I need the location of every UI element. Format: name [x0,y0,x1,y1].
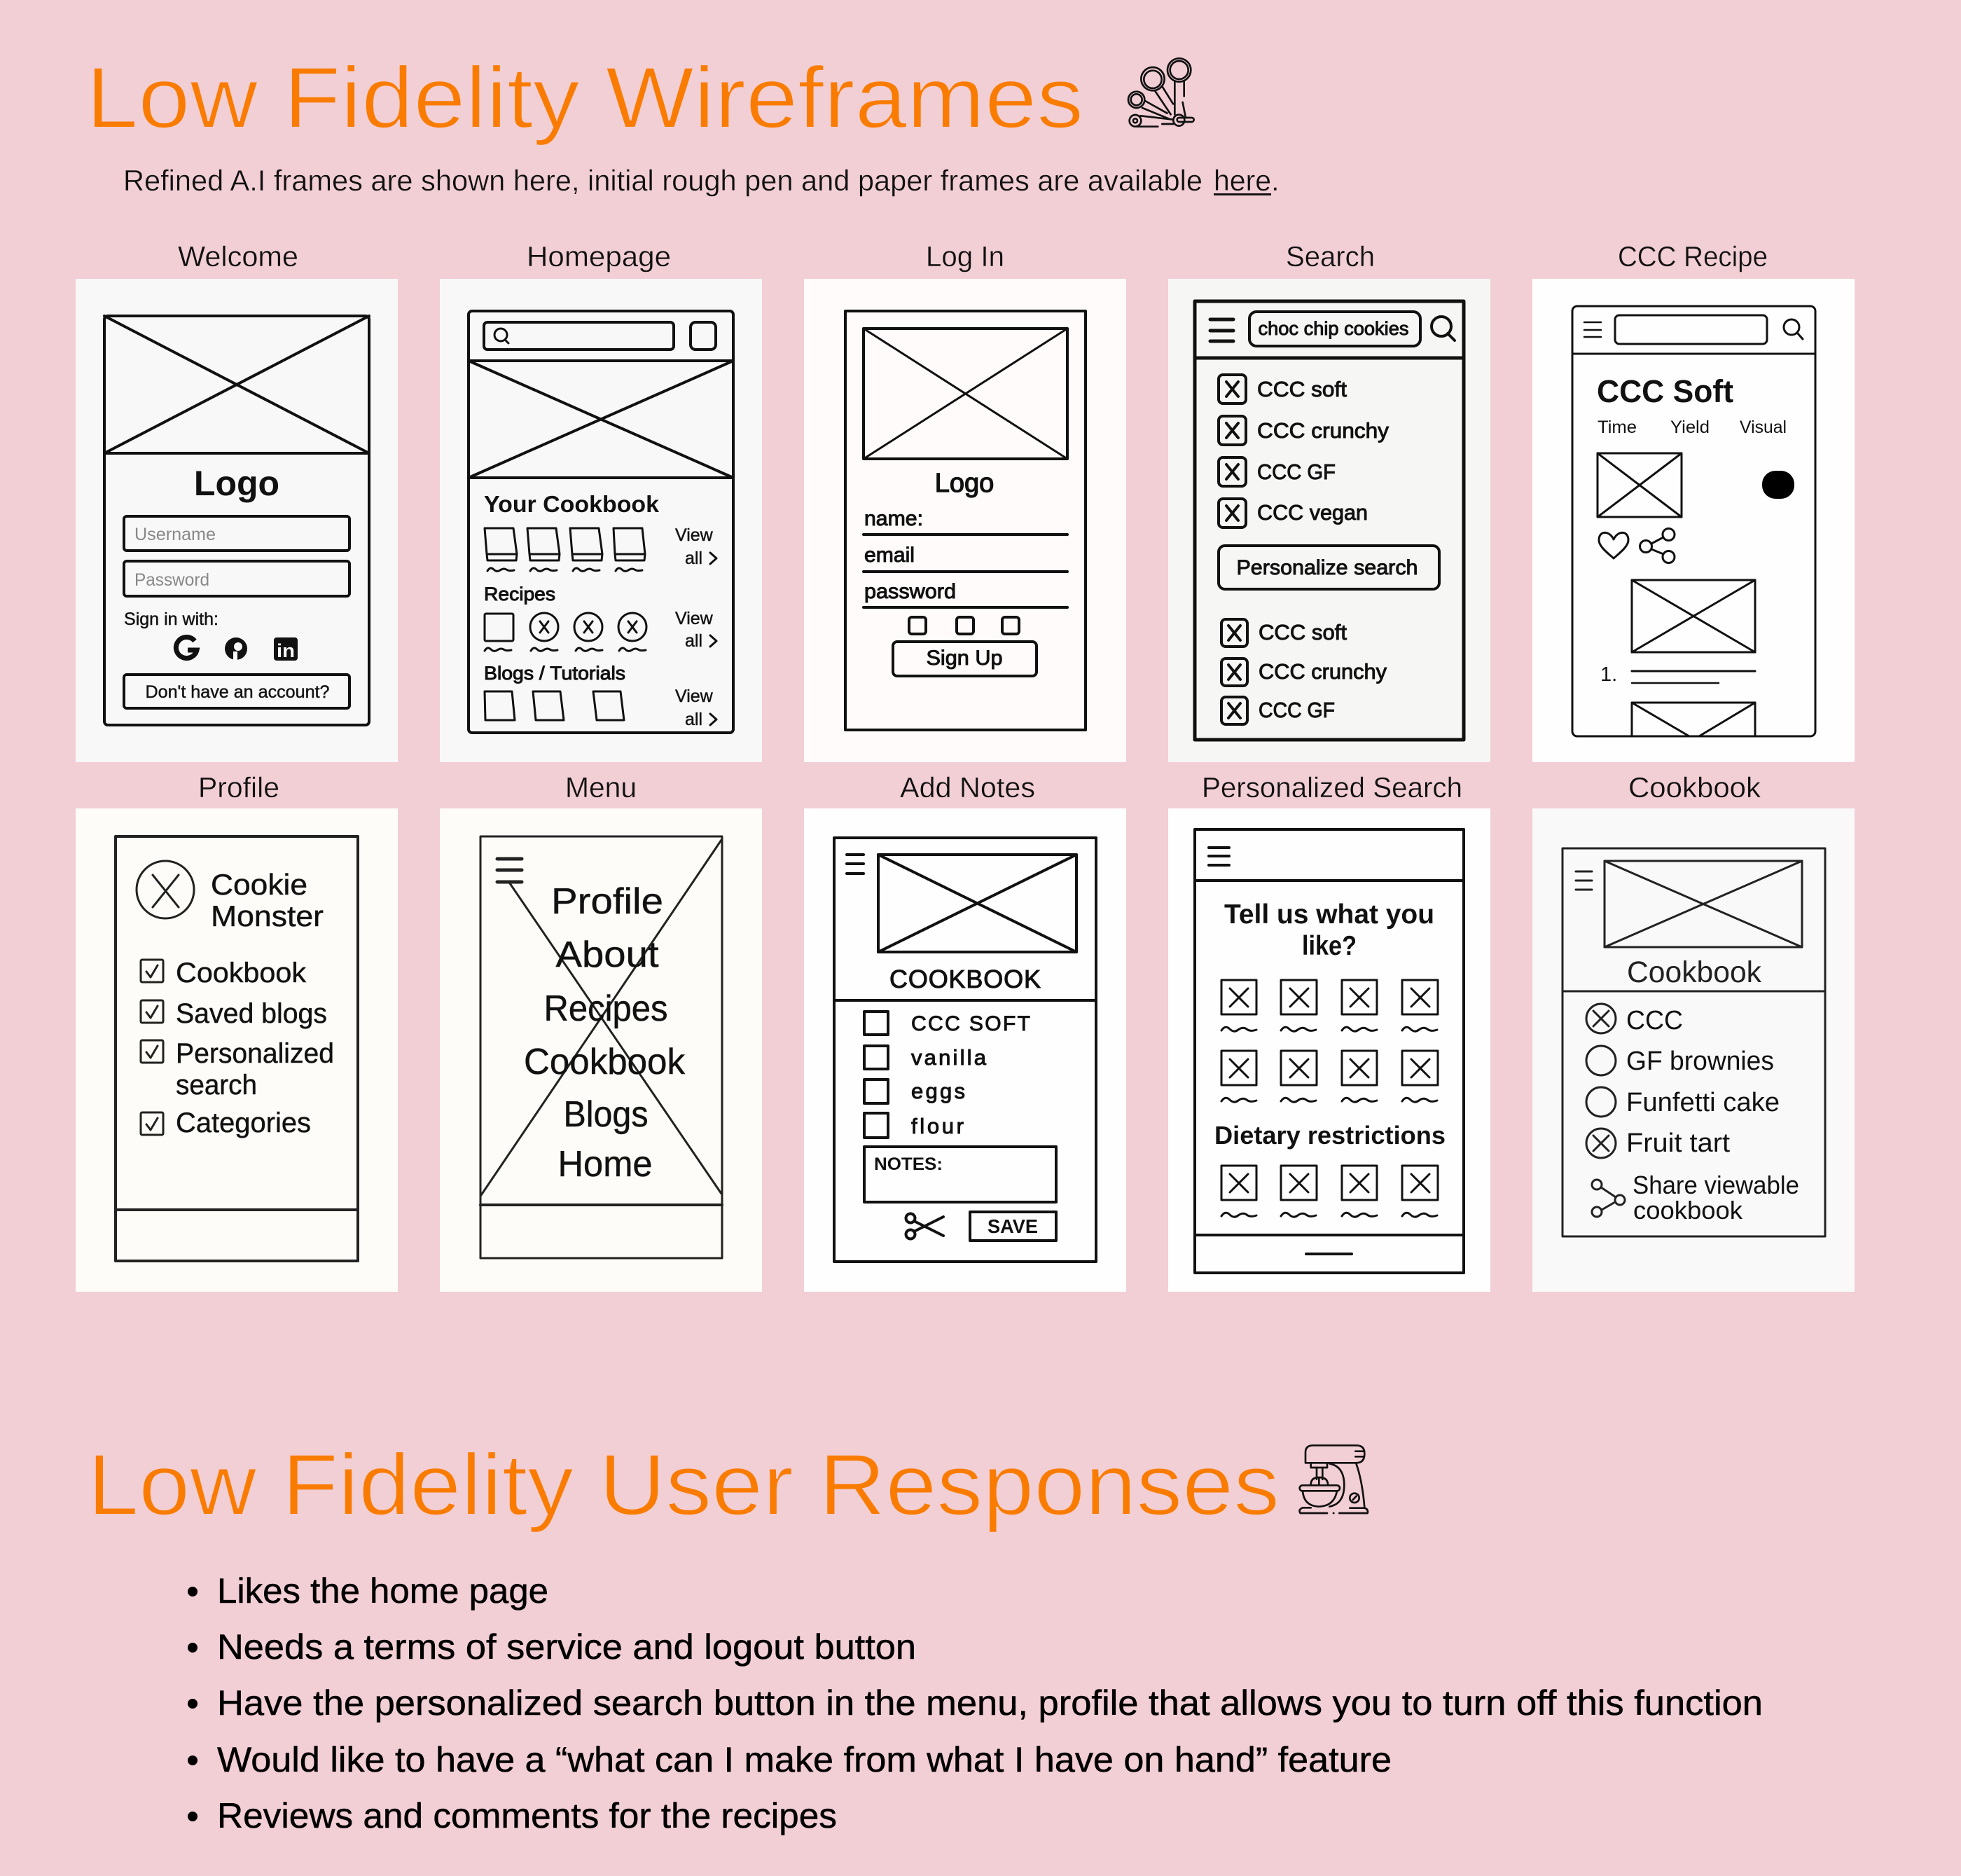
bullet list: user responses: Would like to have a “what can I make from what I have on hand” feature [217,1740,1392,1779]
view all link [675,525,716,568]
ingredient checklist: eggs [911,1079,965,1103]
image placeholder [864,329,1067,459]
view all link: all [685,710,702,729]
recipe radio list [1586,1004,1780,1158]
profile name: Cookie [211,868,307,901]
label: Cookbook: Cookbook [1628,771,1761,803]
bullet list: user responses [188,1571,1763,1835]
ingredient checklist: vanilla [911,1045,987,1070]
hamburger menu [1584,322,1601,337]
label: Add Notes: Add Notes [900,771,1035,803]
icon: magnifier [1784,319,1803,339]
search box: choc chip cookies [1258,318,1409,339]
panel: Welcome wireframe [76,279,398,762]
cookbook thumbnails [485,528,645,571]
account button: Don't have an account? [146,682,329,702]
icon: heart [1599,532,1628,558]
preference grid row one [1221,980,1438,1031]
filter list bottom [1221,619,1387,724]
heading: Dietary restrictions: Dietary restrictions [1214,1121,1446,1150]
phone frame and crossed placeholder [480,836,722,1258]
phone frame [845,311,1086,730]
icon: measuring spoons [1128,58,1194,127]
ingredient checklist [864,1012,1030,1138]
icon: stand mixer [1300,1445,1368,1513]
view all link: View [675,609,714,628]
profile name [211,868,324,932]
username field: Username [134,525,216,544]
profile checklist: Cookbook [176,958,307,988]
save button: SAVE [988,1215,1038,1237]
notes box [864,1147,1056,1202]
sign up button: Sign Up [926,647,1003,670]
label: Homepage: Homepage [527,240,671,273]
email field: email [864,544,915,567]
recipe meta labels: Yield [1670,418,1710,437]
bullet list: user responses: Have the personalized search button in the menu, profile that allows you to turn off this function [217,1683,1763,1723]
password field: Password [134,570,209,590]
save button [970,1212,1056,1241]
step one: 1. [1600,663,1617,686]
icon: LinkedIn [274,637,298,661]
icon: scissors [906,1213,943,1239]
filter list top: CCC vegan [1257,500,1368,525]
heading: CCC Soft: CCC Soft [1597,373,1733,409]
panel: Profile wireframe [76,808,398,1292]
personalize search button: Personalize search [1237,556,1418,579]
heading: COOKBOOK: COOKBOOK [889,965,1041,993]
preference grid row two [1221,1051,1438,1102]
icon: share [1592,1180,1625,1217]
profile name: Monster [211,899,324,932]
recipe meta labels [1598,418,1787,437]
icon: social p [225,637,247,661]
heading: Recipes: Recipes [484,584,555,605]
profile checklist: Categories [176,1108,311,1138]
icon: magnifier [1432,317,1455,340]
blog thumbnails [485,691,624,720]
panel: CCC Recipe wireframe [1532,279,1855,762]
subtitle text: . [1271,164,1280,197]
avatar placeholder [137,861,194,918]
label: Log In: Log In [926,240,1004,273]
phone frame [834,838,1096,1262]
cropped image placeholder [1632,703,1755,736]
recipe thumbnails [485,613,646,651]
view all link: all [685,631,702,651]
recipe meta labels: Time [1598,418,1637,437]
hamburger menu [847,855,864,874]
phone frame and hero image placeholder [104,316,369,725]
phone frame [1572,306,1815,736]
hamburger menu [1210,319,1233,341]
subtitle text: here [1214,164,1271,197]
filter list top: CCC soft [1257,377,1347,401]
username field [124,516,349,551]
label: CCC Recipe: CCC Recipe [1618,240,1768,273]
name field: name: [864,507,923,530]
title: Low Fidelity User Responses: Low Fidelity User Responses [88,1437,1280,1533]
menu items [524,881,686,1185]
filter list top [1219,375,1390,527]
menu items: About [556,934,659,975]
phone frame and hero image placeholder [469,311,733,733]
view all link [675,609,716,651]
panel: Cookbook wireframe [1532,808,1855,1292]
heading: Blogs / Tutorials: Blogs / Tutorials [484,663,625,684]
icon: LinkedIn: in [277,640,295,661]
label: Profile: Profile [198,771,279,803]
icon: Google [176,637,197,658]
logo text: Logo [194,464,279,503]
heading: Cookbook: Cookbook [1627,956,1761,989]
view all link: all [685,549,702,568]
password field [124,561,349,596]
recipe radio list: GF brownies [1626,1047,1774,1076]
share viewable text: cookbook [1633,1196,1743,1225]
image placeholder [1598,453,1682,517]
menu items: Home [557,1144,653,1185]
phone frame [1195,301,1464,740]
label: Welcome: Welcome [178,240,298,273]
password field: password [864,580,956,603]
label: Menu: Menu [565,771,637,803]
recipe radio list: CCC [1626,1006,1683,1035]
view all link: View [675,687,714,706]
search box [1615,315,1767,344]
menu items: Profile [551,881,663,922]
dietary grid [1221,1166,1438,1217]
view all link: View [675,525,714,545]
panel: Menu wireframe [440,808,762,1292]
home indicator [1306,1253,1352,1255]
filter list top: CCC GF [1257,460,1336,484]
filter list bottom: CCC crunchy [1259,659,1387,684]
bullet list: user responses: Reviews and comments for the recipes [217,1796,837,1835]
panel: Log In wireframe [804,279,1126,762]
heading: Tell us what you like [1224,899,1434,961]
image placeholder [878,855,1076,952]
panel: Homepage wireframe [440,279,762,762]
filter list bottom: CCC soft [1259,620,1347,644]
black blob [1762,471,1794,499]
social squares [909,617,1019,634]
profile checklist [141,958,334,1138]
image placeholder [1605,861,1802,947]
panel: Personalized Search wireframe [1168,808,1490,1292]
logo text: Logo [935,469,994,498]
recipe radio list: Fruit tart [1626,1129,1730,1158]
heading: Tell us what you like: Tell us what you [1224,899,1434,930]
phone frame [1562,848,1825,1236]
recipe radio list: Funfetti cake [1626,1088,1780,1117]
filter list bottom: CCC GF [1259,698,1335,722]
hamburger menu [497,859,522,882]
phone frame [1195,829,1464,1273]
hamburger menu [1209,848,1229,865]
view all link [675,687,716,729]
menu items: Blogs [563,1094,649,1135]
panel: Search wireframe [1168,279,1490,762]
panel: Add Notes wireframe [804,808,1126,1292]
menu items: Cookbook [524,1042,686,1082]
profile checklist: Personalized [176,1038,334,1069]
personalize search button [1219,546,1439,589]
profile checklist: search [176,1070,257,1101]
menu items: Recipes [543,988,668,1029]
square button [691,322,716,350]
bullet list: user responses: Likes the home page [217,1571,548,1611]
notes box: NOTES: [874,1154,943,1174]
sign in label: Sign in with: [124,609,219,629]
bullet list: user responses: Needs a terms of service and logout button [217,1627,916,1667]
ingredient checklist: CCC SOFT [911,1012,1030,1035]
label: Search: Search [1286,240,1375,273]
heading: Your Cookbook: Your Cookbook [484,491,660,517]
share viewable text: Share viewable [1633,1171,1799,1199]
subtitle text: Refined A.I frames are shown here, initial rough pen and paper frames are available [123,164,1203,197]
step image placeholder [1632,580,1755,652]
search bar [484,322,674,350]
recipe meta labels: Visual [1740,418,1787,437]
account button [124,675,349,708]
icon: share [1640,528,1675,563]
profile checklist: Saved blogs [176,998,327,1029]
share viewable text [1633,1171,1799,1225]
filter list top: CCC crunchy [1257,418,1390,443]
sign up button [893,642,1037,676]
hamburger menu [1576,871,1592,890]
label: Personalized Search: Personalized Search [1202,771,1462,803]
phone frame [116,836,358,1261]
search box [1249,312,1420,346]
heading: Tell us what you like: like? [1302,931,1357,961]
title: Low Fidelity Wireframes: Low Fidelity Wireframes [86,50,1083,146]
ingredient checklist: flour [911,1114,964,1138]
